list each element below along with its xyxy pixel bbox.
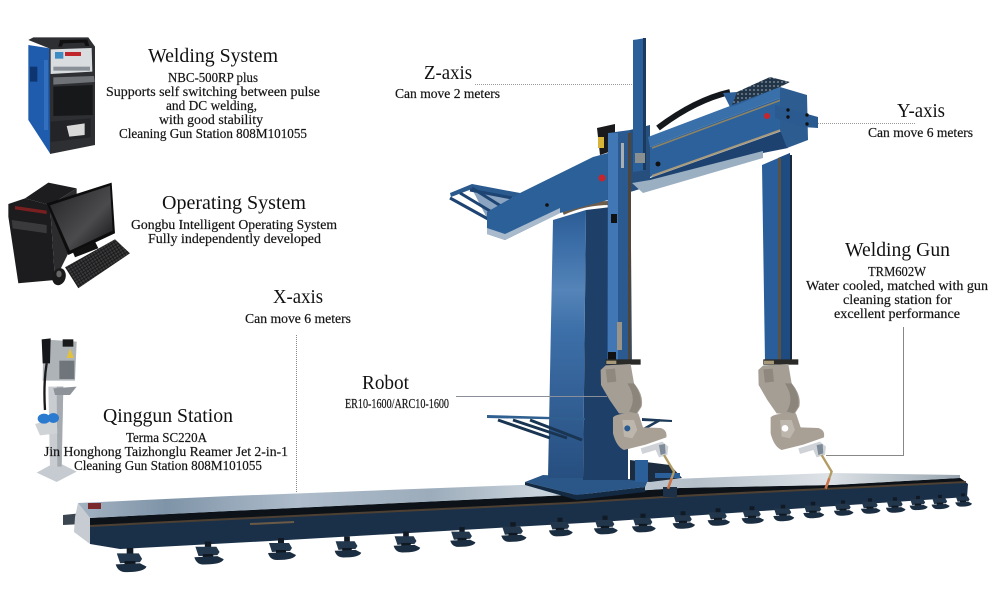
label: z-axis: Z-axis [424, 62, 472, 84]
operating system image [8, 183, 130, 288]
heading: welding system [106, 45, 320, 141]
label: y-axis: Y-axis [897, 100, 945, 122]
qinggun station description: Cleaning Gun Station 808M101055 [74, 458, 262, 473]
label: robot [345, 372, 607, 411]
qinggun station description: Jin Honghong Taizhonglu Reamer Jet 2-in-1 [44, 444, 288, 459]
cable chain [658, 87, 780, 128]
rear arm [450, 153, 608, 240]
welding gun description: cleaning station for [843, 292, 952, 307]
label: robot: Robot [362, 372, 409, 394]
operating system description: Gongbu Intelligent Operating System [131, 217, 337, 232]
pedestal [548, 203, 628, 480]
welding system description: with good stability [159, 112, 263, 127]
label: welding gun [806, 239, 988, 456]
tool shelf [487, 415, 682, 482]
label: x-axis: Can move 6 meters [245, 311, 351, 326]
heading: qinggun station: Qinggun Station [103, 405, 233, 427]
welding gun description [806, 264, 988, 321]
pedestal base plate [525, 475, 677, 500]
heading: operating system [131, 192, 337, 246]
qinggun station description: Terma SC220A [126, 430, 207, 445]
label: y-axis: Can move 6 meters [868, 125, 973, 140]
welding system description [106, 70, 320, 141]
welding system description: Cleaning Gun Station 808M101055 [119, 126, 307, 141]
heading: operating system: Operating System [162, 192, 306, 214]
label: z-axis: Can move 2 meters [395, 86, 500, 101]
label: x-axis [245, 286, 351, 493]
heading: welding system: Welding System [148, 45, 278, 67]
welding gun description: Water cooled, matched with gun [806, 278, 988, 293]
welding system image [28, 37, 95, 154]
label: z-axis [395, 62, 632, 101]
base rail [63, 473, 968, 549]
welding gun description: TRM602W [868, 264, 926, 279]
perforated walkway [732, 77, 790, 105]
beam [630, 77, 818, 193]
label: robot: ER10-1600/ARC10-1600 [345, 396, 449, 411]
robot right [758, 359, 832, 489]
operating system description [131, 217, 337, 246]
right column [762, 153, 792, 362]
robot left [601, 359, 674, 489]
welding system description: Supports self switching between pulse [106, 84, 320, 99]
welding system description: and DC welding, [166, 98, 257, 113]
operating system description: Fully independently developed [148, 231, 321, 246]
label: welding gun: Welding Gun [845, 239, 950, 261]
z-axis column [597, 38, 646, 362]
welding gun description: excellent performance [834, 306, 960, 321]
welding system description: NBC-500RP plus [168, 70, 258, 85]
qinggun station description [44, 430, 288, 473]
base feet [116, 493, 972, 572]
label: y-axis [818, 100, 973, 140]
label: x-axis: X-axis [273, 286, 323, 308]
qinggun station image [35, 338, 77, 482]
heading: qinggun station [44, 405, 288, 473]
